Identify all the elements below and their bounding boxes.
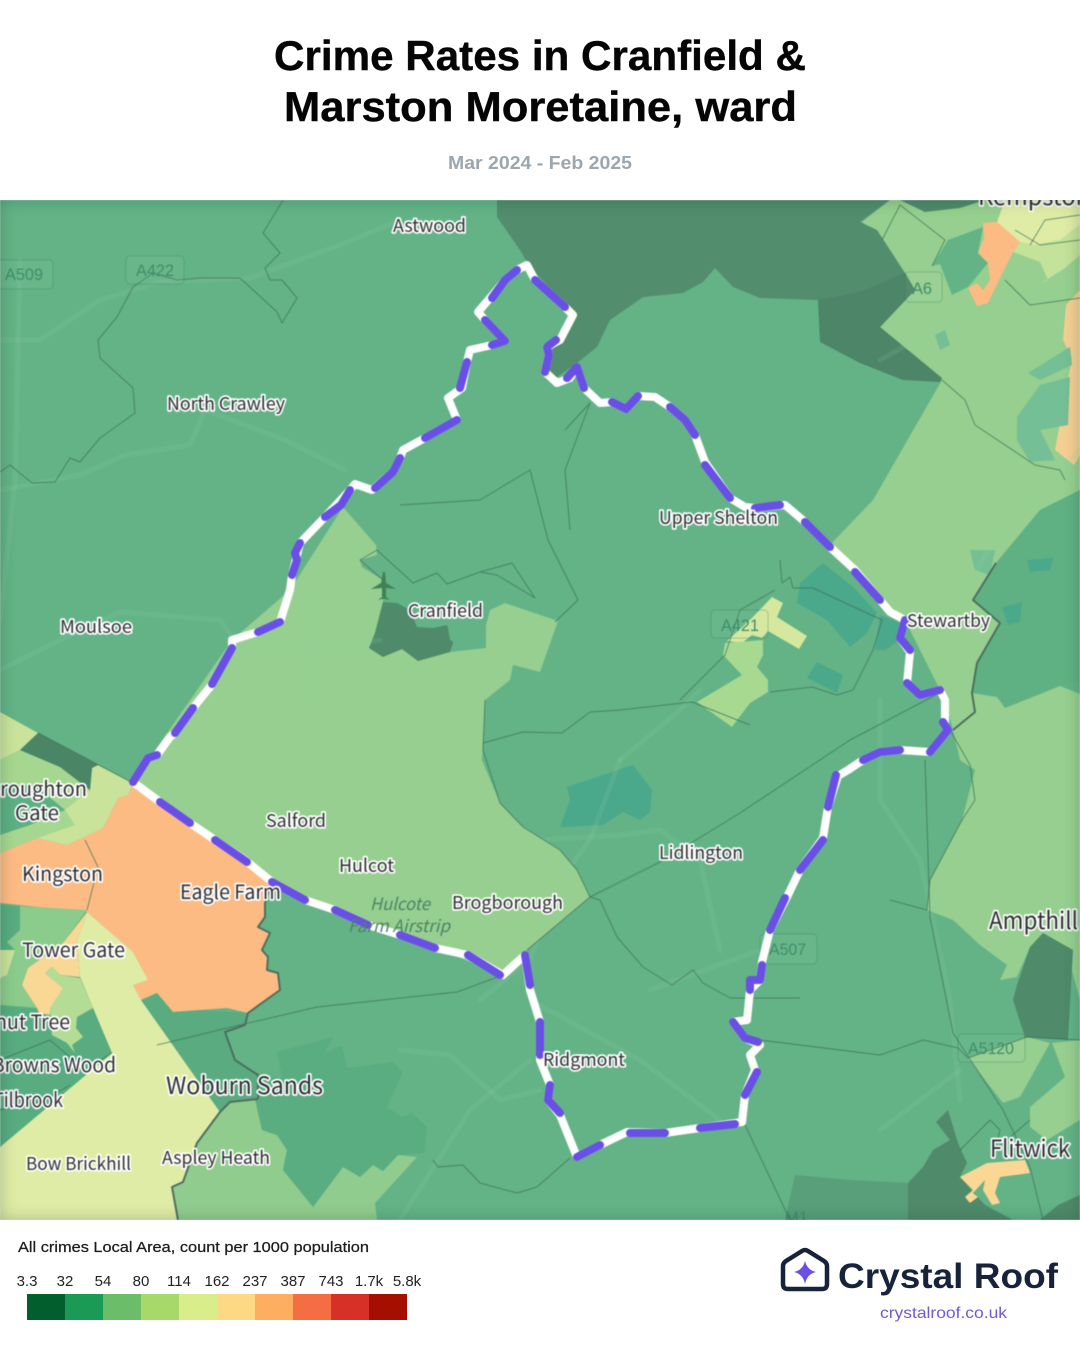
map area: A421 yellow district [727, 597, 807, 649]
map area: Milton Keynes west green [0, 905, 112, 1147]
title: Crime Rates in Cranfield & [274, 32, 806, 79]
legend values: 1.7k [355, 1273, 384, 1290]
legend values: 5.8k [393, 1273, 422, 1290]
map area: east mid green [972, 490, 1080, 708]
icon: airfield plane [371, 572, 396, 600]
place labels: Hulcot [339, 852, 394, 878]
place labels: Cranfield [408, 597, 483, 623]
place labels: Woburn Sands [166, 1066, 323, 1101]
map area: Bow Brickhill yellow district [0, 912, 220, 1220]
title: Marston Moretaine, ward [284, 83, 797, 130]
district boundary lines [0, 200, 1080, 1220]
airstrip label [348, 890, 451, 937]
map area: mid green pocket [932, 227, 988, 295]
map area: ward west light green [133, 507, 590, 975]
map area: south east corner dark [1040, 1195, 1080, 1220]
lake: east pools in mid green [1002, 558, 1053, 625]
legend colour scale [27, 1294, 407, 1320]
ward boundary: white casing [133, 265, 948, 1157]
choropleth map [0, 177, 1080, 1227]
airstrip label: Hulcote [370, 890, 432, 915]
place labels: Tower Gate [22, 934, 125, 963]
map area: Broughton dark [20, 733, 98, 790]
wordmark: Crystal Roof [838, 1257, 1058, 1296]
map area: west pale district [0, 950, 15, 978]
place labels: Kingston [22, 858, 103, 887]
place labels: Upper Shelton [659, 504, 778, 530]
road labels: A421 [721, 616, 759, 635]
map area: Flitwick dark district [908, 1110, 1013, 1220]
icon: house with star [783, 1250, 827, 1289]
map area: Kempston Hardwick light district [697, 640, 768, 727]
road labels: A422 [136, 261, 174, 280]
legend values: 32 [57, 1273, 73, 1290]
map area: Woburn darker green [141, 993, 258, 1112]
map area: top dark district [497, 200, 942, 380]
place labels: Astwood [393, 212, 466, 238]
legend values: 743 [318, 1273, 344, 1290]
map area: Marston Vale orange [0, 783, 280, 1013]
place labels: Lidlington [659, 839, 743, 865]
place labels: Stewartby [907, 607, 991, 633]
map area: orange Kempston [968, 222, 1020, 306]
title [274, 32, 806, 130]
map area: Flitwick east light district [1030, 1040, 1080, 1140]
legend values: 54 [95, 1273, 111, 1290]
map area: Tower Gate light [0, 906, 87, 1008]
legend values: 162 [204, 1273, 230, 1290]
place labels: North Crawley [167, 390, 286, 416]
ward boundary: purple dashes [133, 270, 948, 1157]
map area: Flitwick north light district [968, 1037, 1050, 1103]
place labels: Moulsoe [60, 613, 132, 639]
place labels: Gate [15, 797, 59, 826]
road labels: M1 [785, 1208, 808, 1227]
map area: Cranfield mid green pocket [448, 630, 452, 641]
map area: south east dark strip [785, 1175, 908, 1220]
legend values: 387 [280, 1273, 306, 1290]
map area: yellow Kempston north [997, 200, 1080, 245]
map area: Aspley Heath light green [172, 1099, 417, 1220]
road labels: A507 [769, 940, 806, 959]
lake: Brogborough [560, 765, 652, 827]
map area: Ampthill dark district [1013, 933, 1073, 1040]
lake: Stewartby [797, 563, 877, 647]
map area: east pools in light district [935, 330, 1072, 575]
place labels: Bow Brickhill [26, 1150, 131, 1176]
place labels: Brogborough [452, 889, 563, 915]
map area: Tower Gate tan [22, 912, 87, 1015]
map area: Broughton light [0, 750, 90, 853]
road labels: A6 [912, 279, 932, 298]
road labels: A509 [5, 265, 43, 284]
place labels: Eagle Farm [180, 876, 281, 905]
map area: tan eastern strip [1055, 290, 1080, 465]
county boundary [172, 563, 1000, 1220]
logo: Crystal Roof [783, 1250, 1058, 1322]
roads [0, 220, 1080, 1220]
legend values: 114 [167, 1273, 191, 1290]
lake: small pool [807, 662, 843, 693]
road labels: A5120 [968, 1039, 1014, 1058]
place labels [0, 177, 1080, 1176]
legend title: All crimes Local Area, count per 1000 population [18, 1239, 369, 1256]
place labels: Ridgmont [543, 1046, 625, 1072]
map area: small dark top strip [900, 200, 985, 212]
legend values: 3.3 [17, 1273, 37, 1290]
legend values: 80 [133, 1273, 149, 1290]
map area: Flitwick tan [960, 1160, 1030, 1205]
map area: north west yellow green [0, 712, 38, 760]
map area: Cranfield dark district [369, 602, 453, 661]
map area: Broughton Gate yellow [37, 765, 133, 845]
map area: Broughton green centre [0, 785, 65, 835]
place labels: Aspley Heath [162, 1144, 270, 1170]
legend values [17, 1273, 422, 1290]
legend [17, 1239, 422, 1320]
place labels: Salford [266, 807, 326, 833]
map edge vignette [0, 200, 1080, 1220]
road labels [0, 256, 1025, 1227]
map area: south east light districts [927, 686, 1080, 1000]
subtitle: date range: Mar 2024 - Feb 2025 [448, 153, 632, 173]
legend values: 237 [242, 1273, 268, 1290]
map area: north east light districts [830, 200, 1080, 730]
lake: Stewartby east [875, 615, 900, 650]
map area: Walnut Tree light [45, 967, 93, 1053]
map area: pale Kempston east [1013, 225, 1080, 284]
map area: Woburn central patch [255, 1037, 427, 1207]
website: crystalroof.co.uk [880, 1305, 1008, 1322]
place labels: Flitwick [990, 1129, 1070, 1164]
airstrip label: Farm Airstrip [348, 912, 451, 937]
map area: north east darkest section [818, 273, 942, 382]
